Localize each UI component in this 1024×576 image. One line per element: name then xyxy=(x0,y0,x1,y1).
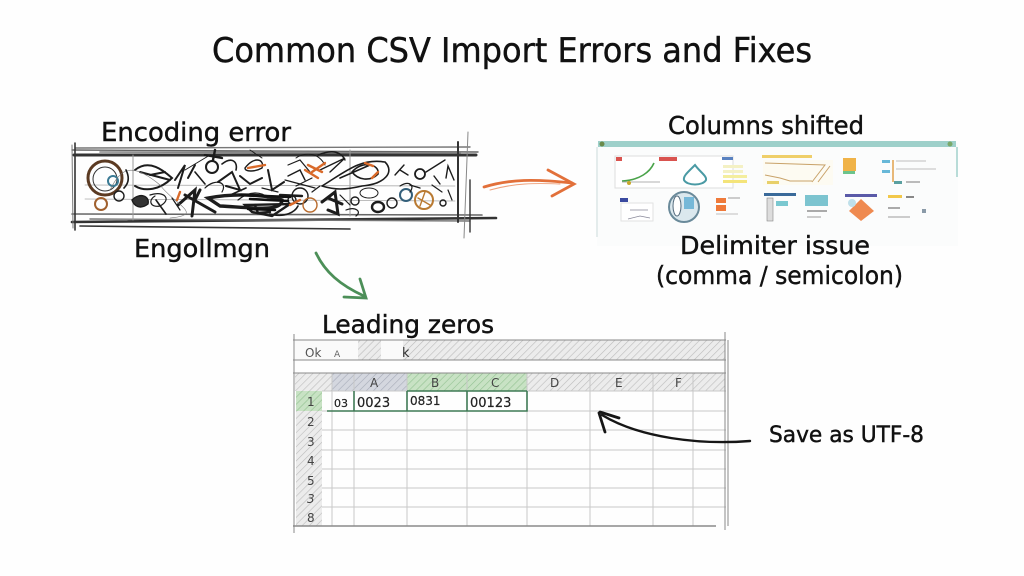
orange scribble accents xyxy=(177,163,378,205)
heading: leading zeros: Leading zeros xyxy=(322,310,494,339)
heading: columns shifted: Columns shifted xyxy=(668,111,864,140)
label: delimiter issue: Delimiter issue xyxy=(680,231,870,260)
panel: columns shifted xyxy=(596,111,958,290)
thumbnail: chart with droplet xyxy=(615,156,733,188)
toolbar: Ok xyxy=(305,346,321,360)
row headers: 3 xyxy=(307,435,315,449)
row headers xyxy=(296,391,322,526)
thumbnail: orange diamond xyxy=(845,194,877,221)
thumbnail: round blue icon xyxy=(669,192,699,222)
column headers: B xyxy=(431,376,439,390)
row headers: 8 xyxy=(307,511,315,525)
row headers: 5 xyxy=(307,474,315,488)
sketched box frame xyxy=(72,132,496,238)
screenshot window xyxy=(596,141,958,246)
title: Common CSV Import Errors and Fixes xyxy=(212,31,812,71)
arrow: orange to columns panel xyxy=(484,170,574,196)
arrow: green to leading zeros xyxy=(316,253,366,298)
thumbnail: orange and blue cards xyxy=(843,158,936,184)
column headers: F xyxy=(675,376,682,390)
row headers: 2 xyxy=(307,415,315,429)
row headers: 4 xyxy=(307,454,315,468)
thumbnail: blue table xyxy=(764,193,828,221)
row headers: 3 xyxy=(307,492,315,506)
toolbar xyxy=(295,340,725,361)
grid lines xyxy=(322,373,726,526)
toolbar: A xyxy=(334,350,341,360)
panel: encoding error xyxy=(72,118,496,263)
toolbar: k xyxy=(402,346,410,361)
label: comma / semicolon: (comma / semicolon) xyxy=(656,261,903,290)
selected cells xyxy=(327,391,527,411)
thumbnail: yellow list xyxy=(722,157,747,183)
label: garbled text: Engollmgn xyxy=(134,234,270,263)
panel: spreadsheet xyxy=(293,310,728,533)
arrow: black to save as UTF-8 xyxy=(599,412,750,442)
scribbled garbled characters xyxy=(88,150,454,218)
thumbnail: line diagram xyxy=(762,155,833,185)
cell values: 0831 xyxy=(410,394,441,408)
row headers: 1 xyxy=(307,395,315,409)
label: save as UTF-8: Save as UTF-8 xyxy=(769,423,924,448)
cell values xyxy=(334,394,511,411)
thumbnail: orange card xyxy=(716,197,740,215)
column headers: E xyxy=(615,376,623,390)
outer frame xyxy=(293,332,728,533)
thumbnail: small chart xyxy=(620,198,653,221)
column headers: D xyxy=(550,376,559,390)
column headers xyxy=(295,373,725,391)
cell values: 0023 xyxy=(357,396,390,411)
cell values: 00123 xyxy=(470,396,511,411)
heading: encoding error: Encoding error xyxy=(101,118,291,148)
column headers: C xyxy=(491,376,499,390)
column headers: A xyxy=(370,376,379,390)
cell values: 03 xyxy=(334,397,348,410)
thumbnail: form xyxy=(888,195,926,218)
